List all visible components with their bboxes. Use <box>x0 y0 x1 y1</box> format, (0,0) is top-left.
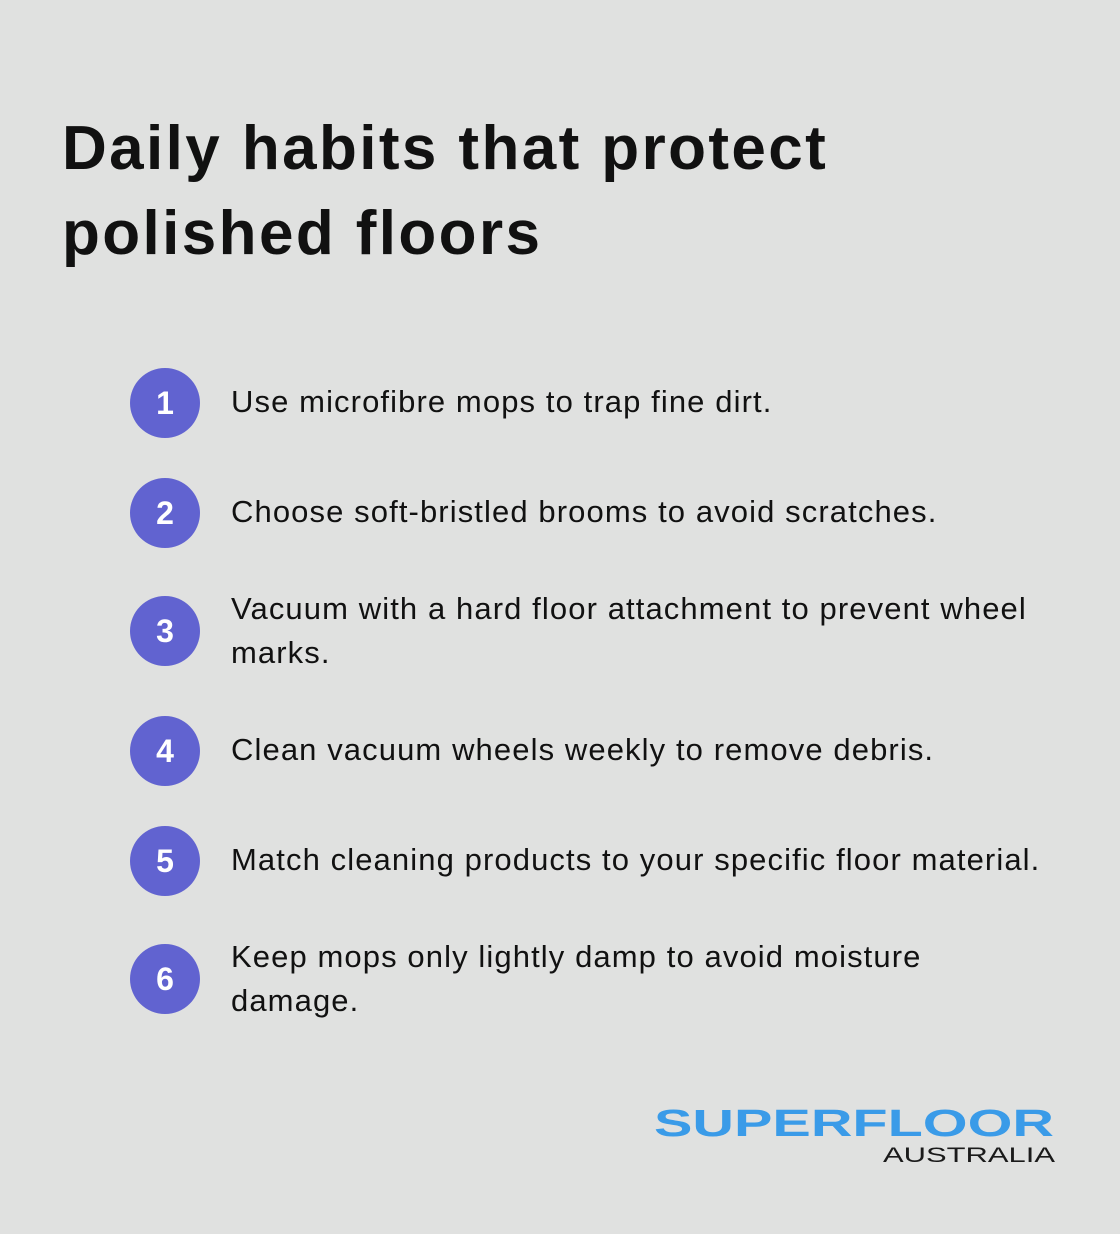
item 6: damage. <box>231 983 359 1018</box>
item 4: Clean vacuum wheels weekly to remove debris. <box>231 732 934 767</box>
item 1 <box>130 368 772 438</box>
item 4 <box>130 716 934 786</box>
item 3 <box>130 591 1027 670</box>
item 3: marks. <box>231 635 331 670</box>
item 5 <box>130 826 1040 896</box>
item 2: Choose soft-bristled brooms to avoid scratches. <box>231 494 937 529</box>
item 5: 5 <box>156 843 174 879</box>
logo <box>654 1104 1055 1166</box>
item 4: 4 <box>156 733 174 769</box>
item 1: Use microfibre mops to trap fine dirt. <box>231 384 772 419</box>
item 3: 3 <box>156 613 174 649</box>
item 1: 1 <box>156 385 174 421</box>
item 3: Vacuum with a hard floor attachment to prevent wheel <box>231 591 1027 626</box>
item 2 <box>130 478 937 548</box>
title: Daily habits that protect <box>62 114 828 183</box>
title: polished floors <box>62 199 542 268</box>
logo: SUPERFLOOR <box>654 1104 1054 1145</box>
item 6: 6 <box>156 961 174 997</box>
item 6: Keep mops only lightly damp to avoid moisture <box>231 939 922 974</box>
item 2: 2 <box>156 495 174 531</box>
item 6 <box>130 939 922 1018</box>
item 5: Match cleaning products to your specific floor material. <box>231 842 1040 877</box>
title <box>62 114 828 268</box>
